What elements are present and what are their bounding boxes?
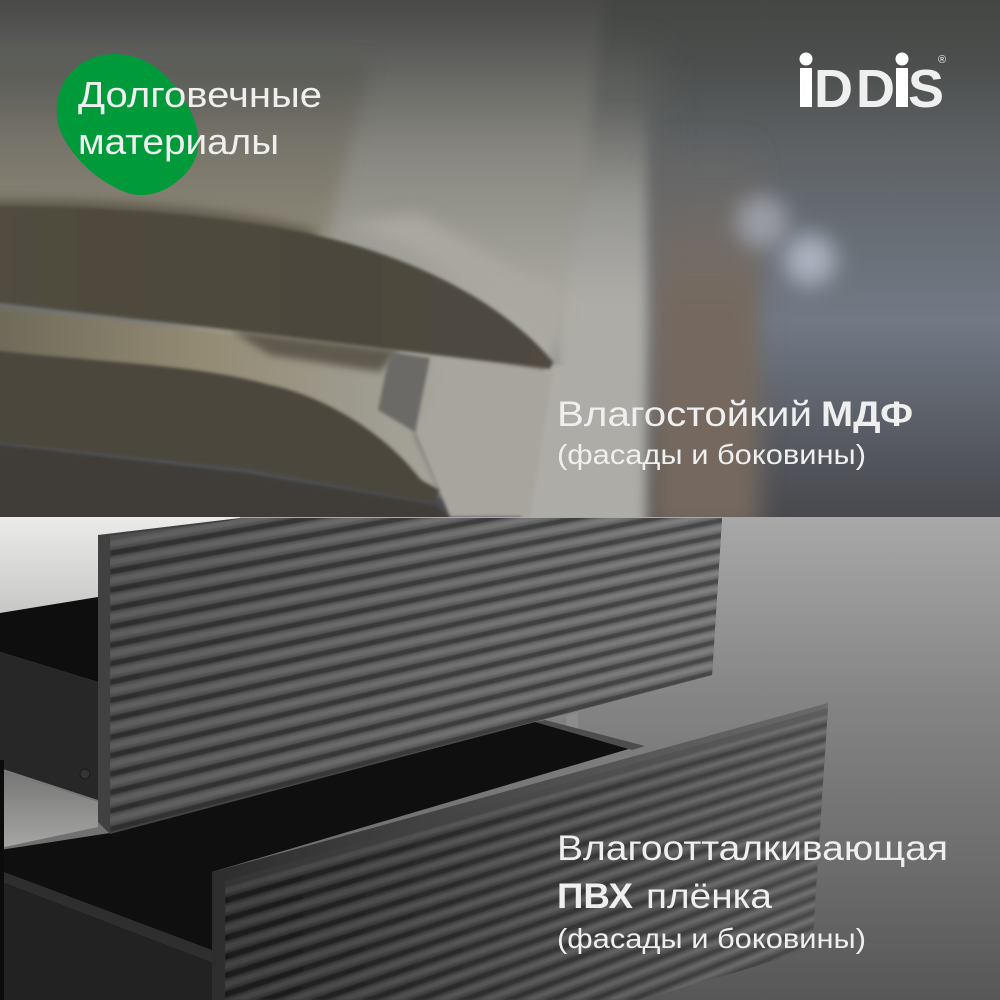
- drawer 2 front: [212, 703, 830, 1000]
- blurred door frame: [646, 204, 770, 517]
- drawer 1 front: [98, 518, 722, 834]
- text block: water-repellent PVC film: [557, 829, 948, 954]
- text block: moisture-resistant MDF: МДФ: [821, 395, 913, 434]
- shadow under blade 1: [230, 330, 400, 372]
- floor left: [4, 787, 98, 848]
- side panel drawer 1: [0, 652, 98, 800]
- blade 2 upper lit band: [0, 303, 460, 497]
- logo: IDDIS: iDDiS: [799, 59, 944, 119]
- heading: durable materials: материалы: [78, 121, 279, 162]
- soft lift right of board: [597, 58, 644, 122]
- shadow on lower board: [378, 352, 430, 432]
- heading: durable materials: [78, 74, 322, 162]
- board surface beige: [0, 70, 363, 237]
- post behind drawer: [566, 712, 578, 728]
- board top surface grey: [0, 0, 606, 370]
- drawer front blade 2: [0, 350, 439, 503]
- strip lower fill: [520, 364, 564, 517]
- logo: IDDIS: ®: [938, 54, 946, 66]
- text block: moisture-resistant MDF: [557, 395, 913, 470]
- side panel drawer 2: [4, 882, 212, 1000]
- text block: water-repellent PVC film: ПВХ: [557, 877, 634, 916]
- white wall left: [0, 517, 240, 617]
- soft edge above blade 1: [0, 194, 320, 236]
- icon: drawer screw: [80, 769, 90, 779]
- text block: water-repellent PVC film: плёнка: [646, 877, 773, 916]
- panel: PVC film photo: [0, 517, 1000, 1000]
- blurred light blob 1: [736, 196, 788, 248]
- text block: moisture-resistant MDF: (фасады и боковины): [557, 439, 866, 470]
- icon: green blob: [57, 54, 198, 195]
- lower right board side: [415, 352, 553, 517]
- panel: MDF photo: [0, 0, 1000, 530]
- drawer front blade 1: [0, 206, 553, 369]
- light band over blade: [364, 214, 483, 266]
- interior drawer 1: [0, 597, 98, 682]
- blurred light blob 2: [784, 234, 836, 286]
- text block: water-repellent PVC film: Влагоотталкивающая: [557, 829, 948, 868]
- third board: [0, 444, 448, 517]
- interior drawer 2: [0, 722, 632, 957]
- text block: moisture-resistant MDF: Влагостойкий: [557, 395, 812, 434]
- blurred light strip: [555, 100, 647, 530]
- heading: durable materials: Долговечные: [78, 74, 322, 115]
- text block: water-repellent PVC film: (фасады и боковины): [557, 923, 866, 954]
